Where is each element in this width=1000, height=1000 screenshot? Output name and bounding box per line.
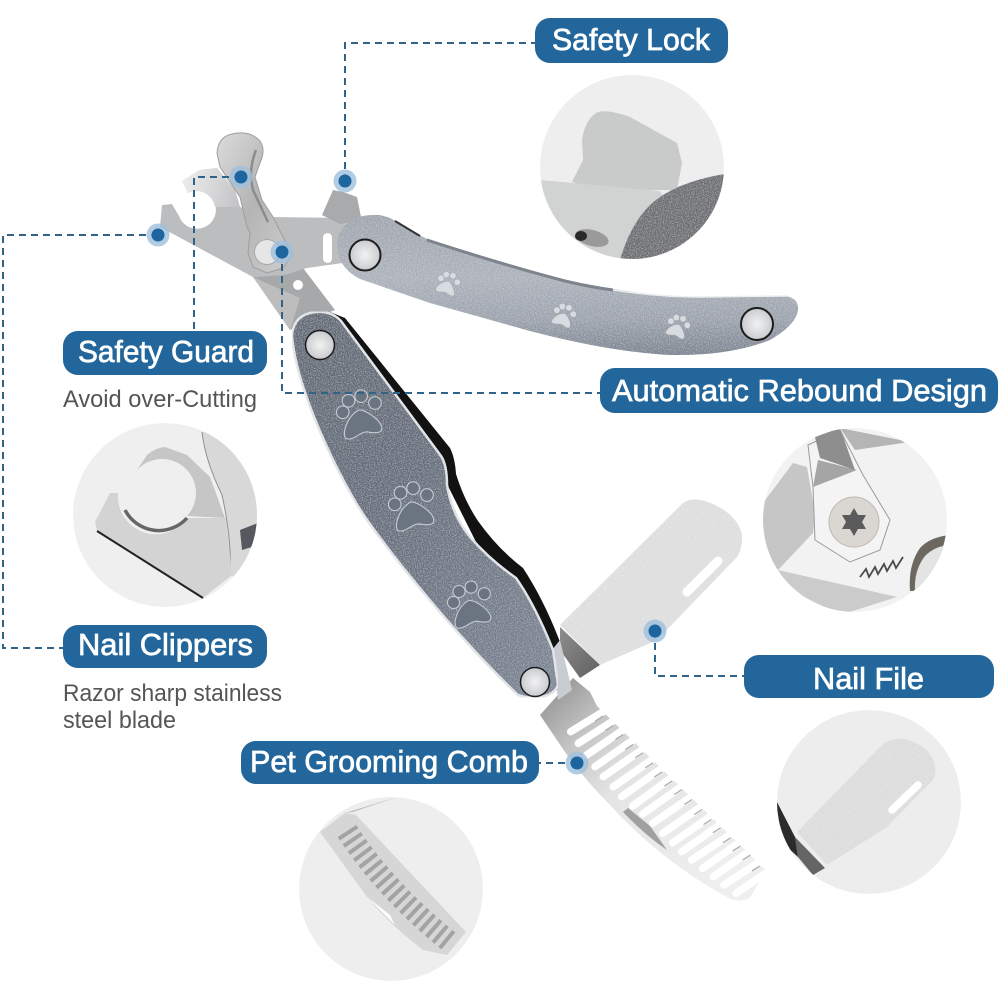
text: razor sharp blade (63, 680, 282, 734)
nail clipper tool (160, 133, 798, 901)
label: Nail File: Nail File (813, 661, 924, 696)
text: avoid over-cutting: Avoid over-Cutting (63, 386, 257, 413)
callout: safety lock marker (334, 170, 356, 192)
nail file blade (560, 499, 742, 678)
detail circle: grooming comb (299, 797, 483, 981)
callout: safety guard marker (230, 166, 252, 188)
screw (741, 308, 773, 340)
pivot screw (254, 240, 280, 264)
callout: nail file marker (644, 620, 666, 642)
text: razor sharp blade: Razor sharp stainless (63, 680, 282, 707)
callout: comb marker (566, 752, 588, 774)
blades (160, 168, 362, 330)
connector lines (3, 43, 744, 763)
label: Automatic Rebound Design: Automatic Rebound Design (612, 373, 987, 408)
screw (520, 668, 550, 696)
label: Safety Guard: Safety Guard (78, 334, 254, 369)
paw emboss (336, 390, 491, 628)
grooming comb (540, 678, 772, 901)
lower handle (292, 312, 572, 700)
detail circle: nail clippers (73, 423, 262, 607)
label: Nail Clippers: Nail Clippers (78, 627, 253, 662)
safety guard (217, 133, 292, 273)
callout: rebound marker (270, 240, 294, 264)
label: Safety Lock: Safety Lock (552, 22, 710, 57)
screw (306, 330, 334, 360)
paw emboss (431, 267, 694, 343)
detail circle: nail file (777, 710, 961, 894)
label: Nail File (744, 655, 994, 698)
detail circle: rebound design (750, 428, 950, 615)
callout: nail clippers marker (146, 224, 170, 246)
label: Safety Lock (535, 18, 728, 63)
text: razor sharp blade: steel blade (63, 707, 176, 734)
detail circle: safety lock (540, 75, 725, 260)
label: Pet Grooming Comb: Pet Grooming Comb (250, 744, 528, 779)
upper handle (337, 215, 798, 355)
screw (350, 240, 380, 270)
